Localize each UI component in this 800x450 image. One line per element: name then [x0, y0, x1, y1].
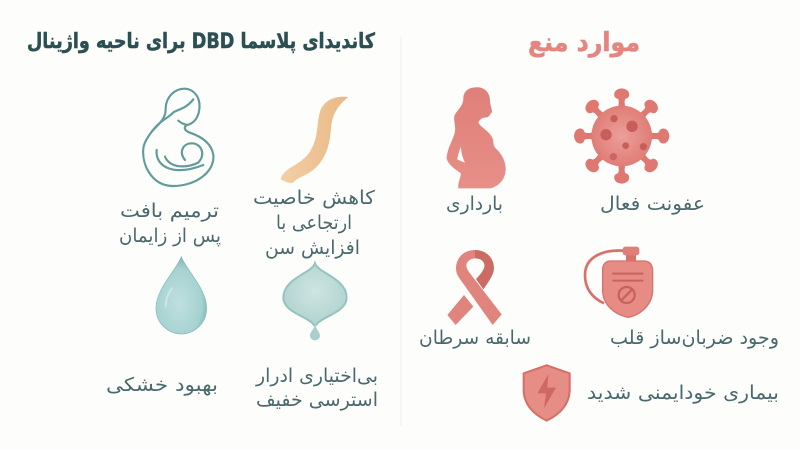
label: active infection: عفونت فعال [600, 193, 705, 215]
label: pacemaker: وجود ضربان‌ساز قلب [610, 327, 779, 349]
label: postpartum repair [119, 200, 221, 247]
label: postpartum repair: پس از زایمان [119, 225, 221, 247]
panel: contraindications [419, 28, 779, 421]
icon: bladder drop [283, 263, 347, 340]
label: reduced elasticity with age [253, 187, 376, 259]
icon: cancer ribbon [447, 250, 502, 325]
heading: contraindications: موارد منع [528, 28, 640, 58]
label: reduced elasticity with age: کاهش خاصیت [253, 187, 376, 209]
icon: pregnant silhouette [447, 87, 506, 188]
label: severe autoimmune disease: بیماری خودایمنی شدید [587, 382, 779, 404]
heading: candidates: کاندیدای پلاسما DBD برای ناحیه واژینال [27, 29, 376, 53]
icon: pacemaker [585, 247, 653, 317]
label: mild stress incontinence: بی‌اختیاری ادرار [255, 365, 378, 387]
icon: breastfeeding mother [143, 89, 213, 186]
label: reduced elasticity with age: افزایش سن [265, 237, 360, 259]
label: cancer history: سابقه سرطان [419, 327, 531, 349]
icon: tan tissue strip [281, 97, 348, 183]
icon: autoimmune shield [524, 365, 570, 421]
label: pregnancy: بارداری [446, 193, 503, 215]
label: mild stress incontinence [255, 365, 378, 411]
panel: DBD vaginal plasma candidates [27, 29, 378, 411]
label: postpartum repair: ترمیم بافت [120, 200, 219, 222]
icon: water drop [156, 257, 207, 334]
label: reduced elasticity with age: ارتجاعی با [276, 212, 352, 234]
label: dryness improvement: بهبود خشکی [106, 374, 218, 396]
icon: virus [574, 88, 669, 184]
label: mild stress incontinence: استرسی خفیف [256, 389, 378, 411]
